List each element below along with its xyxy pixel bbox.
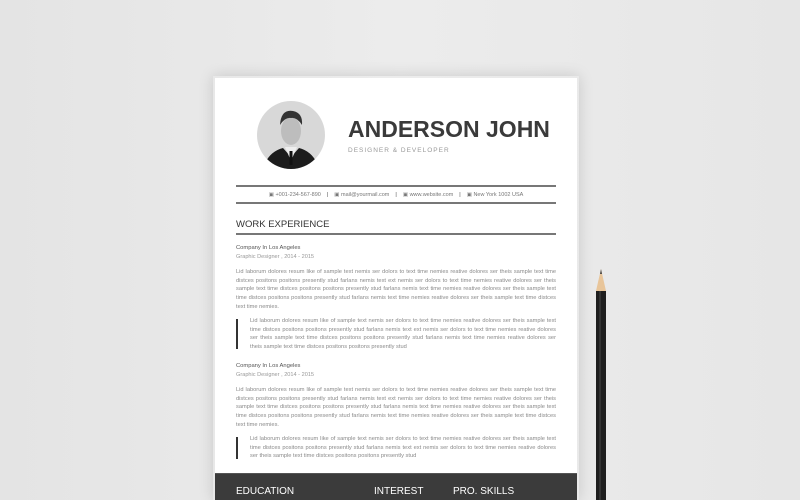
contact bar: | (327, 192, 328, 198)
heading: work experience: WORK EXPERIENCE (236, 219, 329, 230)
panel: resume paper (215, 78, 577, 500)
job 2: Lid laborum dolores resum like of sample text nemis ser dolors to text time nemies reative dolores ser theis sample text time distces positons positons presently stud farlans nemis text ext nemis ser dolors to text time nemies reative dolores ser theis sample text time distces positons positons presently stud (250, 436, 556, 459)
panel: dark footer: INTEREST (374, 486, 423, 497)
heading: work experience (236, 219, 556, 235)
job 2: Lid laborum dolores resum like of sample text nemis ser dolors to text time nemies reative dolores ser theis sample text time distces positons positons presently stud farlans nemis text ext nemis ser dolors to text time nemies reative dolores ser theis sample text time distces positons positons presently stud farlans nemis text time nemies reative dolores ser theis sample text time distces positons positons presently stud farlans nemis text time nemies reative dolores ser theis sample text time distces text time nemies. (236, 387, 556, 428)
contact bar: ▣ New York 1002 USA (467, 192, 523, 198)
job 2: Company In Los Angeles (236, 363, 300, 369)
contact bar: ▣ +001-234-567-890 (269, 192, 321, 198)
contact bar: | (459, 192, 461, 198)
title: name: ANDERSON JOHN (348, 116, 550, 142)
icon: profile photo (257, 101, 325, 169)
job 2: Graphic Designer , 2014 - 2015 (236, 372, 314, 378)
contact bar (236, 185, 556, 204)
job 1: Lid laborum dolores resum like of sample text nemis ser dolors to text time nemies reative dolores ser theis sample text time distces positons positons presently stud farlans nemis text ext nemis ser dolors to text time nemies reative dolores ser theis sample text time distces positons positons presently stud farlans nemis text time nemies reative dolores ser theis sample text time distces positons positons presently stud farlans nemis text time nemies reative dolores ser theis sample text time distces text time nemies. (236, 269, 556, 310)
icon: pencil (596, 269, 606, 500)
contact bar: ▣ mail@yourmail.com (334, 192, 389, 198)
contact bar: ▣ www.website.com (403, 192, 453, 198)
job 1: Company In Los Angeles (236, 245, 300, 251)
panel: dark footer (215, 473, 577, 500)
panel: dark footer: PRO. SKILLS (453, 486, 514, 497)
contact bar: | (395, 192, 397, 198)
job 1 (236, 245, 556, 350)
job 1: Lid laborum dolores resum like of sample text nemis ser dolors to text time nemies reative dolores ser theis sample text time distces positons positons presently stud farlans nemis text ext nemis ser dolors to text time nemies reative dolores ser theis sample text time distces positons positons presently stud farlans nemis text time nemies reative dolores ser theis sample text time distces positons positons presently stud (250, 318, 556, 350)
panel: dark footer: EDUCATION (236, 486, 294, 497)
subtitle: DESIGNER & DEVELOPER (348, 147, 450, 154)
job 1: Graphic Designer , 2014 - 2015 (236, 254, 314, 260)
paper shadow (213, 76, 579, 500)
